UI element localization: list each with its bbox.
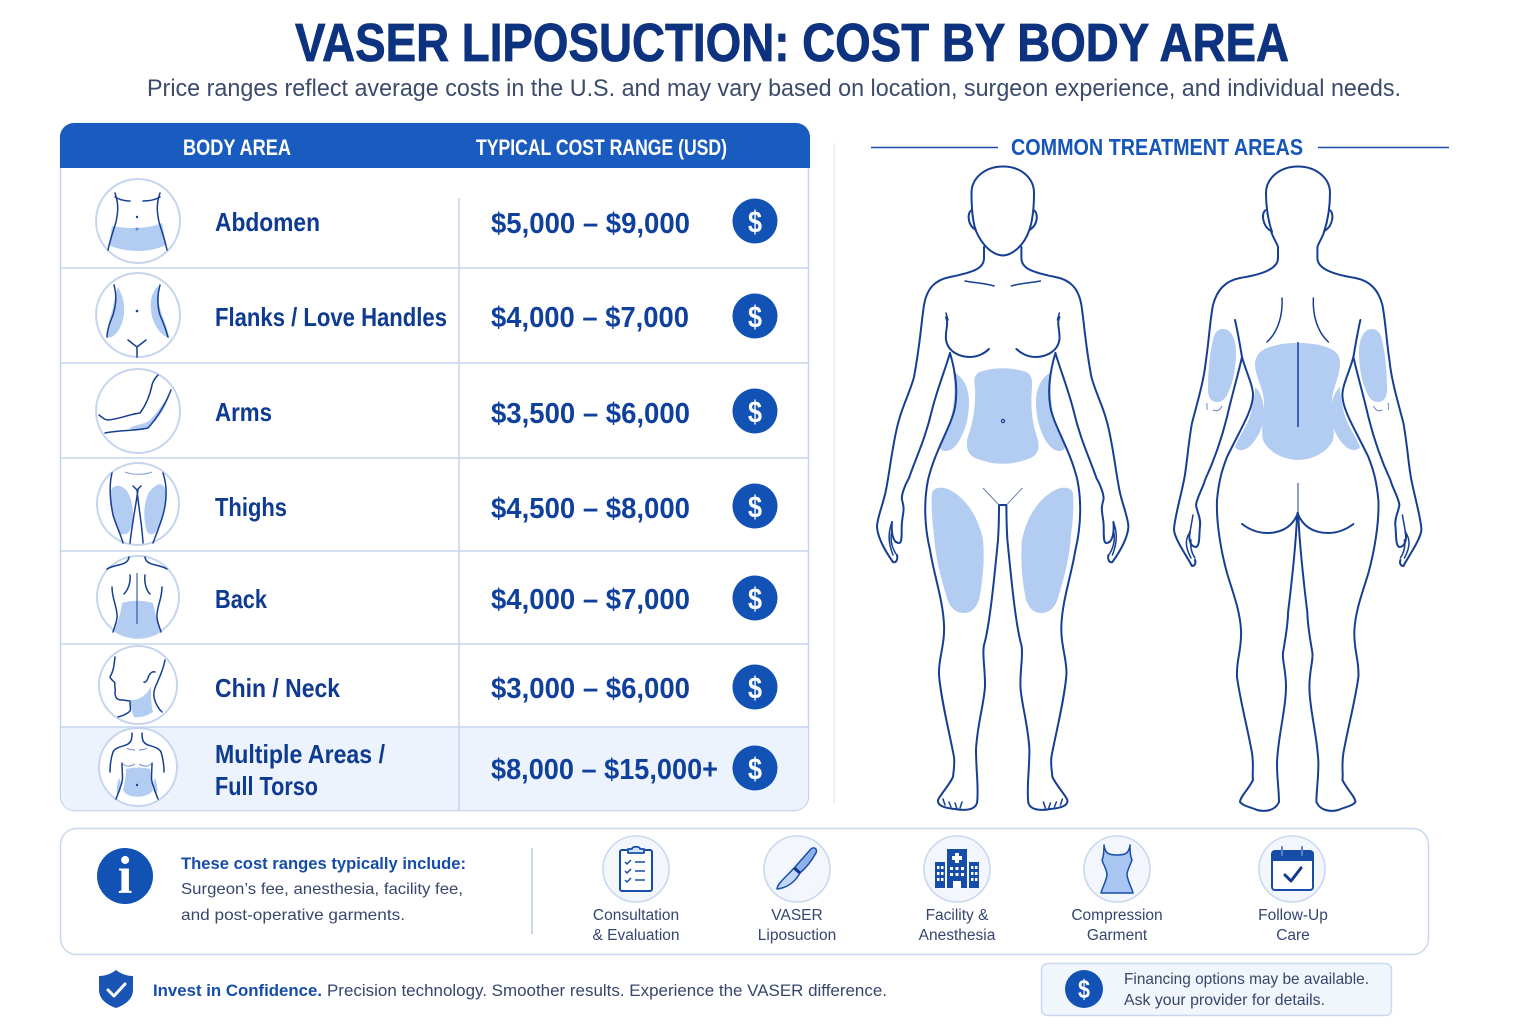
icon: clipboard (620, 847, 652, 891)
row: flanks: $4,000 – $7,000 (491, 302, 689, 334)
panel: what is included (60, 828, 1428, 954)
icon: back (97, 556, 179, 638)
icon: dollar: $ (748, 204, 762, 239)
icon: calendar (1272, 847, 1313, 890)
included text: and post-operative garments. (181, 907, 405, 924)
row: multiple areas: Multiple Areas / (215, 739, 385, 769)
icon: dollar: $ (748, 489, 762, 524)
icon: dollar (1065, 970, 1103, 1008)
item: consultation (592, 836, 680, 944)
item: follow-up care: Follow-Up (1258, 907, 1328, 924)
item: compression garment (1071, 836, 1163, 944)
front outline (877, 166, 1128, 810)
row: back (97, 556, 778, 638)
table frame (60, 124, 808, 810)
icon: dollar (732, 198, 778, 244)
row: chin and neck: Chin / Neck (215, 673, 340, 703)
table header bar: BODY AREA (183, 135, 291, 160)
item: follow-up care: Care (1276, 927, 1310, 944)
row: flanks (96, 273, 778, 357)
icon: shield (99, 970, 133, 1008)
row: multiple areas (99, 728, 778, 806)
chart: front body figure (877, 166, 1128, 810)
item: facility (919, 836, 996, 944)
callout: financing: Financing options may be available. (1124, 971, 1369, 988)
tagline: Invest in Confidence. (153, 982, 322, 1000)
panel: cost table (60, 123, 810, 810)
icon: dollar (732, 664, 778, 710)
included text: Surgeon’s fee, anesthesia, facility fee, (181, 881, 463, 898)
icon: dollar (732, 388, 778, 434)
icon: abdomen (96, 179, 180, 263)
row: chin and neck: $3,000 – $6,000 (491, 673, 690, 705)
icon: dollar: $ (1078, 974, 1090, 1004)
back treatment patches (1208, 329, 1387, 460)
row: arms: $3,500 – $6,000 (491, 398, 690, 430)
icon: dollar: $ (748, 751, 762, 786)
icon: dollar: $ (748, 670, 762, 705)
icon: dollar (732, 484, 778, 528)
icon: tank top (1101, 845, 1133, 893)
back outline (1174, 166, 1421, 811)
included text (181, 855, 466, 924)
included text: These cost ranges typically include: (181, 855, 466, 873)
panel: common treatment areas (871, 134, 1449, 811)
row: flanks: Flanks / Love Handles (215, 302, 447, 332)
row: abdomen (96, 179, 778, 263)
item: vaser liposuction: Liposuction (758, 927, 836, 944)
row: thighs (97, 463, 778, 545)
item: facility: Anesthesia (919, 927, 996, 944)
icon: dollar: $ (748, 581, 762, 616)
icon: neck (99, 646, 177, 724)
item: consultation: Consultation (593, 907, 679, 924)
icon: hospital (935, 849, 979, 888)
icon: scalpel (777, 848, 816, 889)
icon: dollar: $ (748, 394, 762, 429)
heading: COMMON TREATMENT AREAS (1011, 134, 1303, 160)
row: thighs: Thighs (215, 492, 287, 522)
item: compression garment: Garment (1087, 927, 1148, 944)
highlighted row background (61, 727, 808, 810)
table header bar (60, 123, 810, 168)
tagline: Precision technology. Smoother results. Experience the VASER difference. (327, 982, 887, 1000)
front treatment patches (932, 368, 1073, 613)
icon: torso (99, 728, 177, 806)
row: arms: Arms (215, 397, 272, 427)
title: VASER LIPOSUCTION: COST BY BODY AREA (295, 13, 1289, 73)
item: consultation: & Evaluation (592, 927, 680, 944)
icon: info: i (118, 847, 132, 905)
item: follow-up care (1258, 836, 1328, 944)
table header bar: TYPICAL COST RANGE (USD) (476, 135, 727, 160)
item: vaser liposuction: VASER (771, 907, 823, 924)
row: abdomen: $5,000 – $9,000 (491, 208, 690, 240)
icon: dollar (732, 576, 778, 620)
icon: flanks (96, 273, 180, 357)
item: facility: Facility & (926, 907, 989, 924)
row: chin and neck (99, 646, 778, 724)
row: multiple areas: Full Torso (215, 771, 318, 801)
icon: info (97, 847, 153, 905)
icon: dollar (732, 294, 778, 338)
item: vaser liposuction (758, 836, 836, 944)
item: compression garment: Compression (1071, 907, 1163, 924)
row: thighs: $4,500 – $8,000 (491, 493, 690, 525)
icon: arms (96, 369, 180, 453)
callout: financing (1042, 964, 1392, 1016)
row: back: $4,000 – $7,000 (491, 584, 690, 616)
row: abdomen: Abdomen (215, 207, 320, 237)
tagline (99, 970, 887, 1008)
row: back: Back (215, 584, 267, 614)
row: arms (96, 369, 778, 453)
icon: dollar: $ (748, 299, 762, 334)
icon: dollar (732, 746, 778, 790)
row: multiple areas: $8,000 – $15,000+ (491, 754, 718, 786)
icon: thighs (97, 463, 179, 545)
chart: back body figure (1174, 166, 1421, 811)
subtitle: Price ranges reflect average costs in the U.S. and may vary based on location, surgeon experience, and individual needs. (147, 75, 1401, 102)
callout: financing: Ask your provider for details. (1124, 992, 1325, 1009)
